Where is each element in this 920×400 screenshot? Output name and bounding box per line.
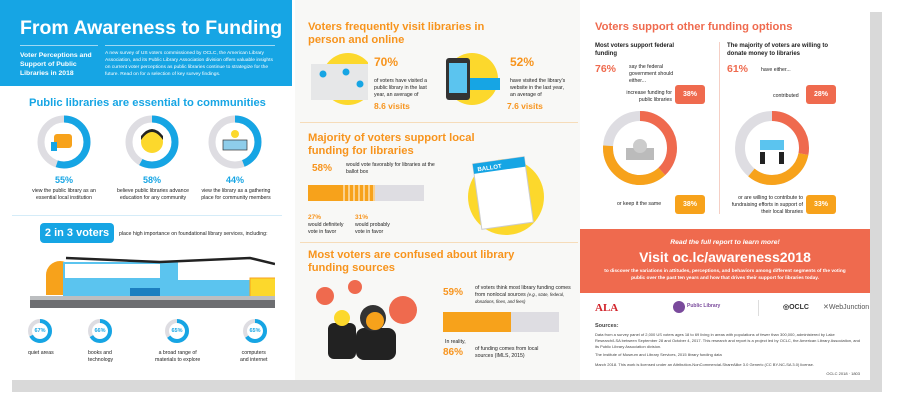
badge: 2 in 3 voters bbox=[40, 223, 114, 243]
panel: donations: have either... bbox=[761, 67, 791, 73]
sources bbox=[595, 323, 860, 376]
small donuts: services: 65% bbox=[249, 328, 260, 334]
small donuts: services: 65% bbox=[171, 328, 182, 334]
donut stats: essential: view the public library as an essential local institution bbox=[32, 188, 96, 201]
bar: funding sources: of funding comes from local sources (IMLS, 2015) bbox=[475, 346, 538, 359]
logos: ALA bbox=[595, 302, 618, 314]
small donuts: services: a broad range of bbox=[159, 350, 197, 356]
logos: ✕WebJunction bbox=[823, 304, 869, 311]
sources: Data from a survey panel of 2,000 US voters ages 18 to 69 living in areas with populations of fewer than 300,000, administered by Lake Research/LSA between September 28 and October 4, 2017. This research and report is a project led by OCLC, the American Library Association, and its Public Library Association division. bbox=[595, 332, 860, 349]
panel: donations: 28% bbox=[814, 91, 828, 98]
bar: funding sources: of voters think most library funding comes from nonlocal sources (e.g., state, federal, donations, fines, and fees) bbox=[475, 285, 571, 304]
heading: confusion: Most voters are confused about library funding sources bbox=[308, 249, 514, 274]
heading: visits: Voters frequently visit libraries in person and online bbox=[308, 21, 484, 46]
small donuts: services: technology bbox=[88, 357, 113, 363]
heading: essential: Public libraries are essential to communities bbox=[29, 97, 266, 109]
heading: local funding: Majority of voters support local funding for libraries bbox=[308, 132, 475, 157]
logos: ◎OCLC bbox=[783, 304, 809, 311]
small donuts: services: and internet bbox=[240, 357, 267, 363]
bar: funding sources bbox=[443, 285, 571, 359]
donut stats: essential: view the library as a gathering place for community members bbox=[201, 188, 271, 201]
bar: local funding: 31% bbox=[355, 214, 368, 221]
donut stats: essential: 44% bbox=[226, 175, 244, 185]
panel: federal funding: Most voters support federal funding bbox=[595, 43, 674, 57]
stat: online visits: 52% bbox=[510, 55, 534, 69]
sources: March 2018. This work is licensed under an Attribution-NonCommercial-ShareAlike 3.0 Generic (CC BY-NC-SA 3.0) license. bbox=[595, 362, 814, 367]
stat: online visits: have visited the library's website in the last year, an average of bbox=[510, 78, 565, 98]
bar: local funding: would definitely bbox=[308, 222, 343, 228]
illustration: confused voters bbox=[316, 280, 417, 360]
icon: ballot bbox=[468, 156, 544, 235]
callout: full report: to discover the variations in attitudes, perceptions, and behaviors among different segments of the voting public over the past ten years and how that drives their support for libraries today. bbox=[604, 269, 846, 281]
heading: other funding: Voters support other funding options bbox=[595, 21, 792, 33]
intro paragraph: A new survey of US voters commissioned by OCLC, the American Library Association, and its Public Library Association division offers valuable insights on current voter perceptions as public libraries continue to strategize for the future. Read on for a selection of key survey findings. bbox=[105, 51, 273, 77]
small donuts: services: computers bbox=[242, 350, 266, 356]
small donuts: services bbox=[28, 319, 268, 363]
badge caption: place high importance on foundational library services, including: bbox=[119, 231, 268, 237]
panel: federal funding: 38% bbox=[683, 91, 697, 98]
stat: online visits: 7.6 visits bbox=[507, 101, 543, 111]
panel: donations: 33% bbox=[814, 201, 828, 208]
panel: donations: contributed bbox=[773, 93, 799, 99]
panel: federal funding: increase funding for public libraries bbox=[626, 90, 672, 103]
sources: OCLC 2018 · 1803 bbox=[826, 371, 860, 376]
donut stats: essential: 55% bbox=[55, 175, 73, 185]
panel: donations: or are willing to contribute to fundraising efforts in support of their local libraries bbox=[732, 195, 803, 215]
stat: online visits bbox=[446, 53, 565, 111]
stat: in-person visits: of voters have visited a public library in the last year, an average of bbox=[374, 78, 427, 98]
callout: full report: Read the full report to learn more! bbox=[670, 239, 780, 246]
bar: funding sources: 59% bbox=[443, 287, 463, 298]
panel: donations: The majority of voters are willing to donate money to libraries bbox=[727, 43, 828, 57]
panel: federal funding: 76% bbox=[595, 63, 616, 75]
illustration: library building bbox=[30, 256, 275, 308]
stat: in-person visits bbox=[311, 53, 427, 111]
panel: federal funding: say the federal government should either... bbox=[629, 64, 673, 84]
logos bbox=[595, 300, 869, 316]
text: vote in favor bbox=[308, 229, 336, 235]
panel: donations bbox=[727, 42, 836, 215]
panel: federal funding bbox=[595, 42, 705, 214]
small donuts: services: quiet areas bbox=[28, 350, 54, 356]
panel: federal funding: 38% bbox=[683, 201, 697, 208]
logos: Public Library bbox=[687, 303, 720, 309]
stat: in-person visits: 70% bbox=[374, 55, 398, 69]
bar: local funding: 58% bbox=[312, 163, 332, 174]
bar: local funding bbox=[308, 162, 435, 235]
column 2 background bbox=[295, 0, 580, 380]
donut stats: essential: believe public libraries advance education for any community bbox=[117, 188, 189, 201]
donut stats: essential bbox=[32, 116, 271, 201]
callout: full report bbox=[580, 229, 870, 293]
bar: local funding: would probably bbox=[355, 222, 390, 228]
bar: local funding: would vote favorably for libraries at the ballot box bbox=[346, 162, 435, 175]
icon: ballot: BALLOT bbox=[477, 164, 502, 173]
donut stats: essential: 58% bbox=[143, 175, 161, 185]
title: From Awareness to Funding bbox=[20, 17, 282, 39]
small donuts: services: materials to explore bbox=[155, 357, 200, 363]
small donuts: services: 67% bbox=[34, 328, 46, 334]
small donuts: services: 66% bbox=[94, 328, 106, 334]
subtitle: Voter Perceptions and Support of Public Libraries in 2018 bbox=[20, 52, 92, 77]
panel: donations: 61% bbox=[727, 63, 748, 75]
badge: 2 in 3 voters: 2 in 3 voters bbox=[45, 227, 109, 239]
sources: Sources: bbox=[595, 323, 619, 329]
sources: The Institute of Museum and Library Services, 2015 library funding data bbox=[595, 352, 722, 357]
header banner bbox=[0, 0, 292, 86]
text: vote in favor bbox=[355, 229, 383, 235]
bar: funding sources: 86% bbox=[443, 347, 463, 358]
bar: funding sources: In reality, bbox=[445, 339, 466, 345]
callout: full report: Visit oc.lc/awareness2018 bbox=[639, 249, 811, 265]
stat: in-person visits: 8.6 visits bbox=[374, 101, 410, 111]
small donuts: services: books and bbox=[88, 350, 112, 356]
bar: local funding: 27% bbox=[308, 214, 321, 221]
panel: federal funding: or keep it the same bbox=[617, 201, 661, 207]
